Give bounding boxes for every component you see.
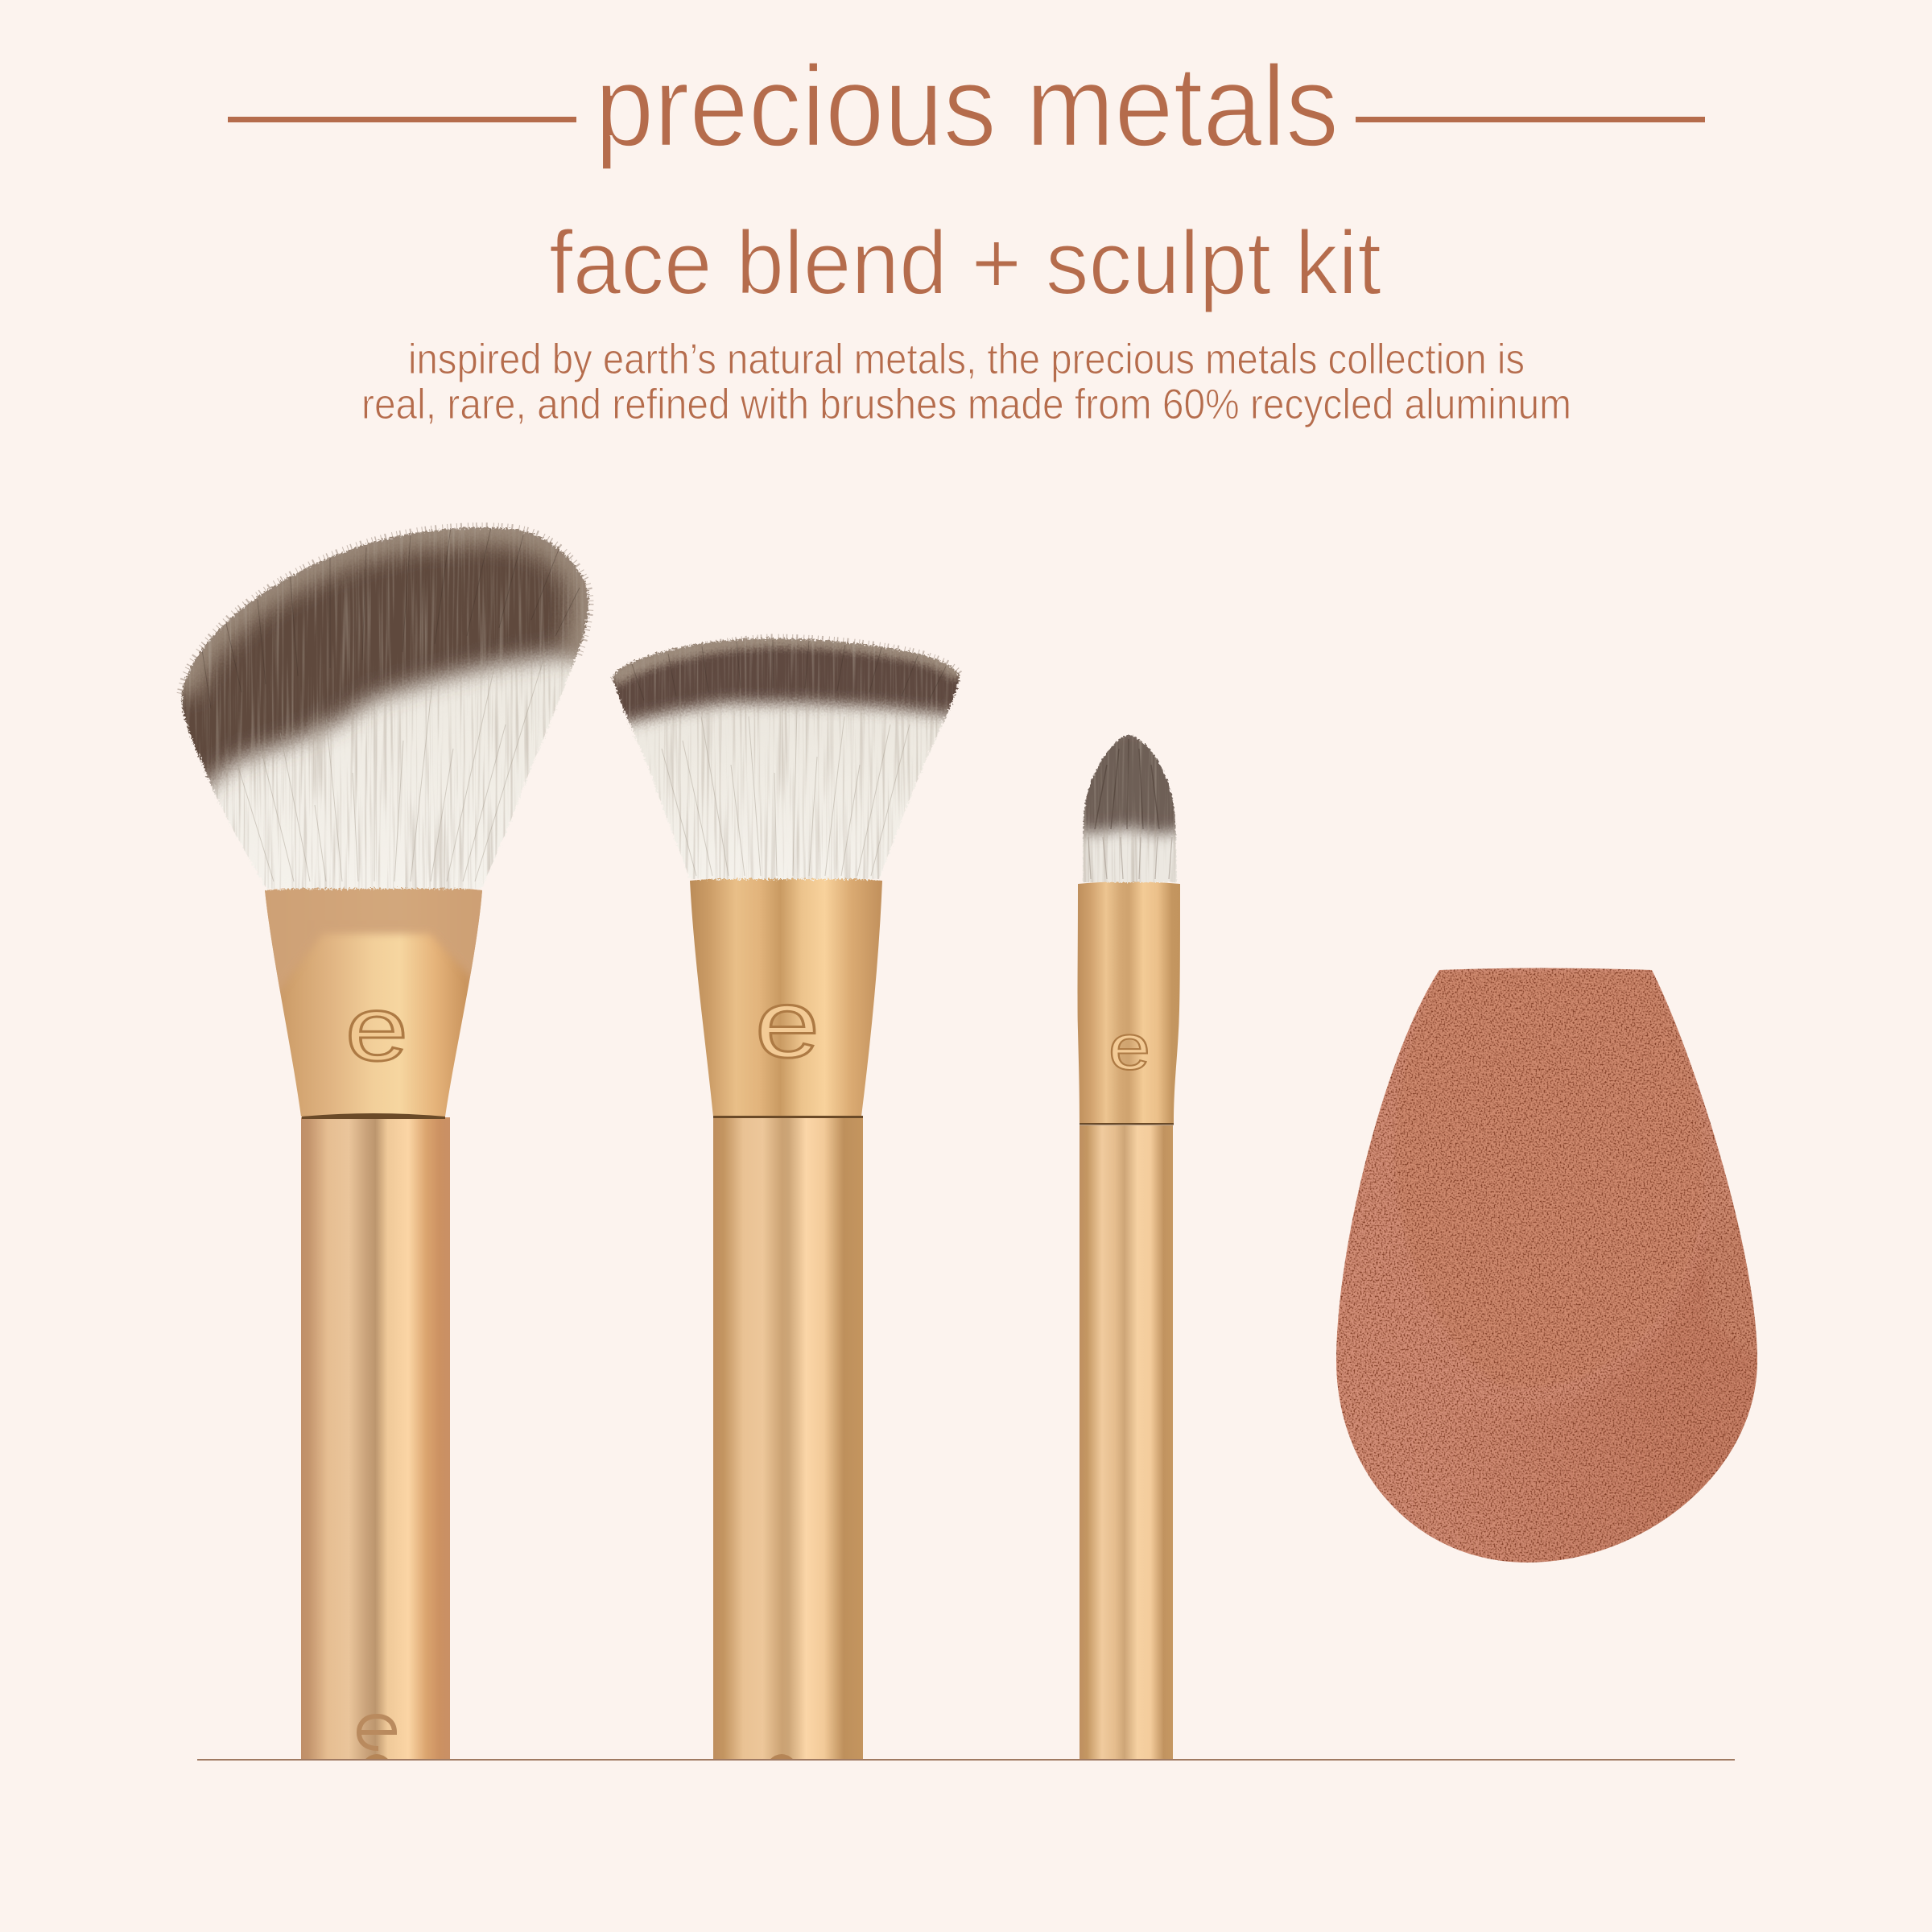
brush 3: small pointed: [1071, 724, 1191, 1760]
brush 3 ferrule: [1078, 881, 1180, 1125]
brush 1 logo: e: [345, 978, 408, 1080]
brush 3 bristles: [1071, 724, 1191, 886]
brush 1 ferrule: [250, 869, 499, 1119]
brush 2 logo: e: [755, 970, 819, 1078]
brush 3 handle: [1080, 1125, 1173, 1760]
description line 1: inspired by earth’s natural metals, the precious metals collection is: [408, 336, 1525, 383]
brush 2 bristles: [596, 628, 974, 886]
title rule right: [1356, 117, 1705, 122]
subtitle: face blend + sculpt kit: [549, 213, 1381, 313]
title rule left: [228, 117, 576, 122]
title: precious metals: [595, 43, 1339, 171]
baseline rule: [197, 1759, 1735, 1761]
description line 2: real, rare, and refined with brushes made from 60% recycled aluminum: [361, 381, 1571, 428]
brush 2 handle: [713, 1118, 863, 1760]
header: [228, 43, 1705, 428]
brush 2 ferrule: [690, 876, 882, 1118]
brush 1 handle: [301, 1117, 450, 1760]
brush 1: large angled: [161, 515, 628, 1760]
brush 2: flat top: [596, 628, 974, 1760]
brush 1 bristles: [161, 515, 628, 894]
makeup sponge: [1320, 958, 1771, 1578]
brush 3 logo: e: [1108, 1011, 1150, 1083]
